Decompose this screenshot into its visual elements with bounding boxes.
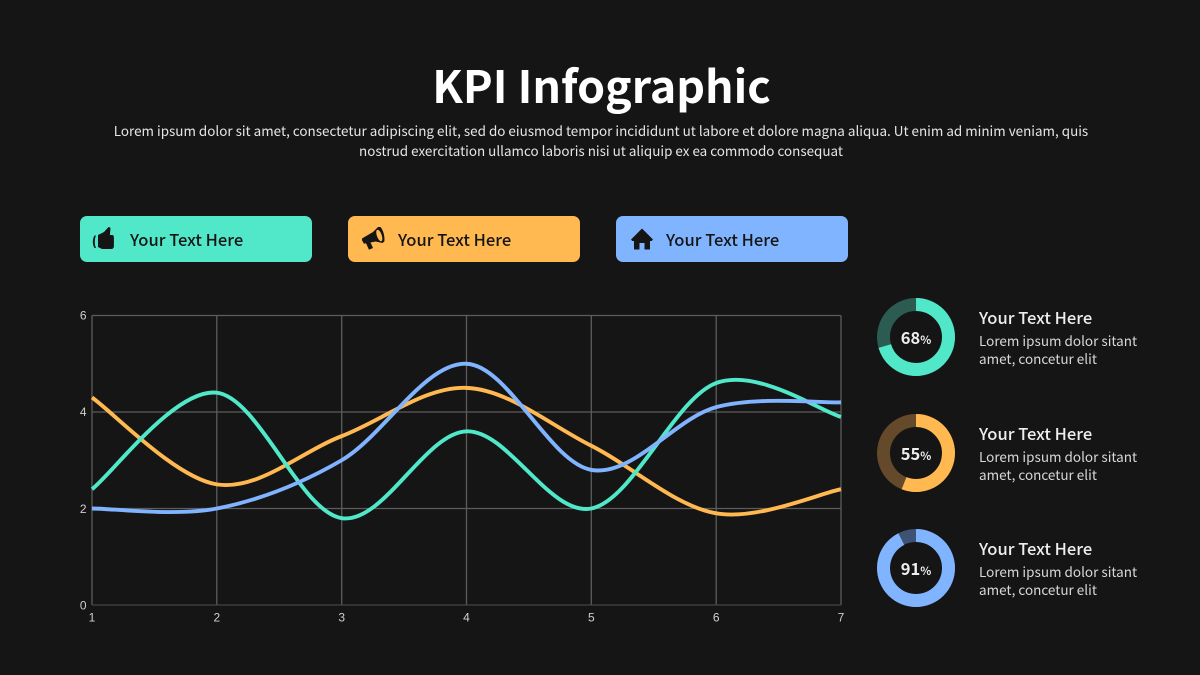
donut: 91% (877, 529, 955, 607)
y axis labels: 4 (80, 405, 87, 419)
KPI text: Lorem ipsum dolor sitant (979, 330, 1137, 350)
KPI text: Lorem ipsum dolor sitant (979, 561, 1137, 581)
donut: 55% (877, 414, 955, 492)
KPI text (979, 330, 1137, 368)
KPI text (979, 561, 1137, 599)
KPI text: Lorem ipsum dolor sitant (979, 446, 1137, 466)
title: KPI Infographic (432, 51, 771, 116)
percent value: 68% (901, 325, 931, 349)
icon: house (631, 228, 653, 250)
KPI: 55 percent (877, 414, 1137, 492)
percent value: 91% (901, 556, 931, 580)
x axis labels: 5 (588, 610, 595, 624)
KPI heading: Your Text Here (979, 536, 1092, 560)
button: blue with house (616, 216, 848, 262)
x axis labels: 4 (463, 610, 470, 624)
button: teal with thumbs up (80, 216, 312, 262)
icon: megaphone (362, 227, 384, 250)
intro text (114, 120, 1088, 160)
x axis labels: 2 (213, 610, 220, 624)
y axis labels: 0 (80, 598, 87, 612)
KPI text: amet, concetur elit (979, 348, 1097, 368)
icon: thumbs up (92, 227, 114, 249)
y axis labels: 6 (80, 308, 87, 322)
series: teal line (92, 380, 841, 518)
button label: Your Text Here (130, 226, 243, 250)
x axis labels: 6 (713, 610, 720, 624)
y axis labels: 2 (80, 502, 87, 516)
KPI text (979, 446, 1137, 484)
KPI heading: Your Text Here (979, 420, 1092, 444)
intro text: nostrud exercitation ullamco laboris nisi ut aliquip ex ea commodo consequat (359, 140, 843, 160)
series: blue line (92, 364, 841, 512)
percent value: 55% (901, 441, 931, 465)
x axis labels: 7 (838, 610, 845, 624)
x axis labels: 1 (89, 610, 96, 624)
y axis labels (80, 308, 87, 612)
KPI heading: Your Text Here (979, 304, 1092, 328)
intro text: Lorem ipsum dolor sit amet, consectetur adipiscing elit, sed do eiusmod tempor incididunt ut labore et dolore magna aliqua. Ut enim ad minim veniam, quis (114, 120, 1088, 140)
button: orange with megaphone (348, 216, 580, 262)
button label: Your Text Here (666, 226, 779, 250)
donut: 68% (877, 298, 955, 376)
KPI: 91 percent (877, 529, 1137, 607)
x axis labels (89, 610, 845, 624)
series: orange line (92, 388, 841, 515)
button label: Your Text Here (398, 226, 511, 250)
KPI text: amet, concetur elit (979, 579, 1097, 599)
x axis labels: 3 (338, 610, 345, 624)
KPI text: amet, concetur elit (979, 464, 1097, 484)
KPI: 68 percent (877, 298, 1137, 376)
